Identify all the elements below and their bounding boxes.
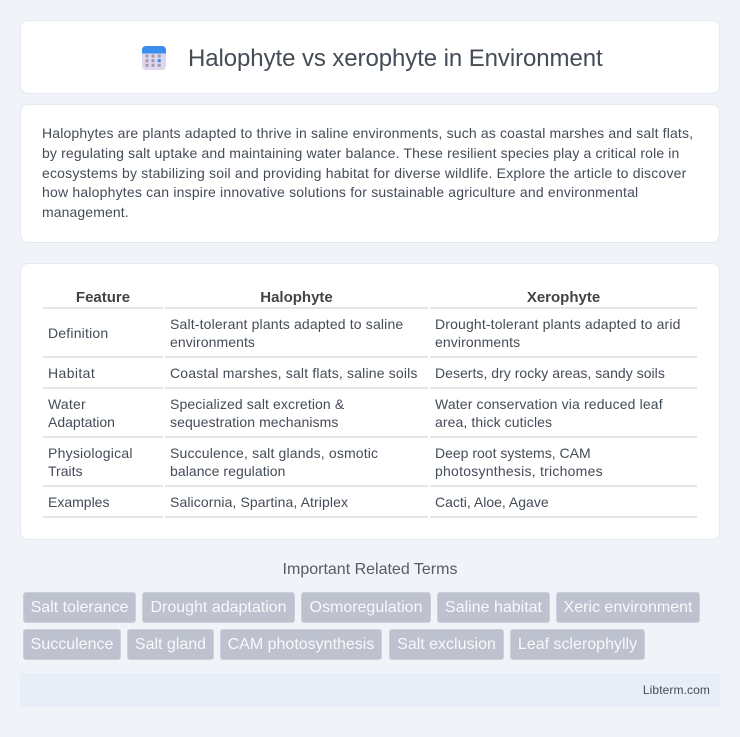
intro text: how halophytes can inspire innovative solutions for sustainable agriculture and environmental xyxy=(42,184,638,200)
row: definition: environments xyxy=(435,334,520,350)
related terms tags: CAM photosynthesis xyxy=(228,636,374,653)
icon: calendar xyxy=(142,46,166,70)
row: water adaptation: Adaptation xyxy=(48,414,115,430)
related terms tags: Salt exclusion xyxy=(397,636,496,653)
intro text: Halophytes are plants adapted to thrive in saline environments, such as coastal marshes and salt flats, xyxy=(42,125,693,141)
row: water adaptation xyxy=(43,396,697,438)
row: physiological traits: Succulence, salt glands, osmotic xyxy=(170,445,378,461)
row: examples: Cacti, Aloe, Agave xyxy=(435,494,549,510)
related terms tags: Osmoregulation xyxy=(310,599,422,616)
comparison table panel xyxy=(20,263,720,540)
related terms tags: Salt tolerance xyxy=(31,599,128,616)
row: examples: Examples xyxy=(48,494,109,510)
footer credit: Libterm.com xyxy=(643,683,710,697)
row: definition: Definition xyxy=(48,325,108,341)
intro text: management. xyxy=(42,204,129,220)
related terms tags: Saline habitat xyxy=(445,599,542,616)
row: physiological traits: Deep root systems, CAM xyxy=(435,445,591,461)
row: water adaptation: Water xyxy=(48,396,86,412)
row: water adaptation: Water conservation via reduced leaf xyxy=(435,396,663,412)
related terms tags: Drought adaptation xyxy=(150,599,287,616)
row: water adaptation: Specialized salt excretion & xyxy=(170,396,344,412)
table header: Feature xyxy=(76,289,130,306)
related terms tags: Salt gland xyxy=(135,636,206,653)
row: definition: Salt-tolerant plants adapted to saline xyxy=(170,316,403,332)
intro text xyxy=(42,125,693,220)
related terms tags: Leaf sclerophylly xyxy=(518,636,637,653)
row: examples xyxy=(43,494,697,518)
row: water adaptation: area, thick cuticles xyxy=(435,414,552,430)
row: physiological traits: balance regulation xyxy=(170,463,286,479)
header panel xyxy=(20,20,720,94)
footer bar xyxy=(20,673,720,707)
row: physiological traits: Traits xyxy=(48,463,82,479)
row: habitat xyxy=(43,365,697,389)
table header xyxy=(43,289,697,309)
row: physiological traits: photosynthesis, trichomes xyxy=(435,463,603,479)
related terms tags: Xeric environment xyxy=(564,599,692,616)
related terms tags: Succulence xyxy=(31,636,113,653)
row: examples: Salicornia, Spartina, Atriplex xyxy=(170,494,348,510)
row: habitat: Deserts, dry rocky areas, sandy soils xyxy=(435,365,665,381)
intro panel xyxy=(20,104,720,243)
row: definition xyxy=(43,316,697,358)
title: Halophyte vs xerophyte in Environment xyxy=(188,45,603,72)
row: physiological traits xyxy=(43,445,697,487)
row: water adaptation: sequestration mechanisms xyxy=(170,414,338,430)
table header: Halophyte xyxy=(260,289,333,306)
row: habitat: Coastal marshes, salt flats, saline soils xyxy=(170,365,418,381)
table header: Xerophyte xyxy=(527,289,600,306)
row: definition: Drought-tolerant plants adapted to arid xyxy=(435,316,681,332)
row: definition: environments xyxy=(170,334,255,350)
intro text: ecosystems by stabilizing soil and providing habitat for diverse wildlife. Explore the article to discover xyxy=(42,165,686,181)
row: physiological traits: Physiological xyxy=(48,445,133,461)
related terms tags xyxy=(23,592,700,660)
related terms heading: Important Related Terms xyxy=(283,561,457,578)
intro text: by regulating salt uptake and maintaining water balance. These resilient species play a critical role in xyxy=(42,145,680,161)
row: habitat: Habitat xyxy=(48,365,95,381)
